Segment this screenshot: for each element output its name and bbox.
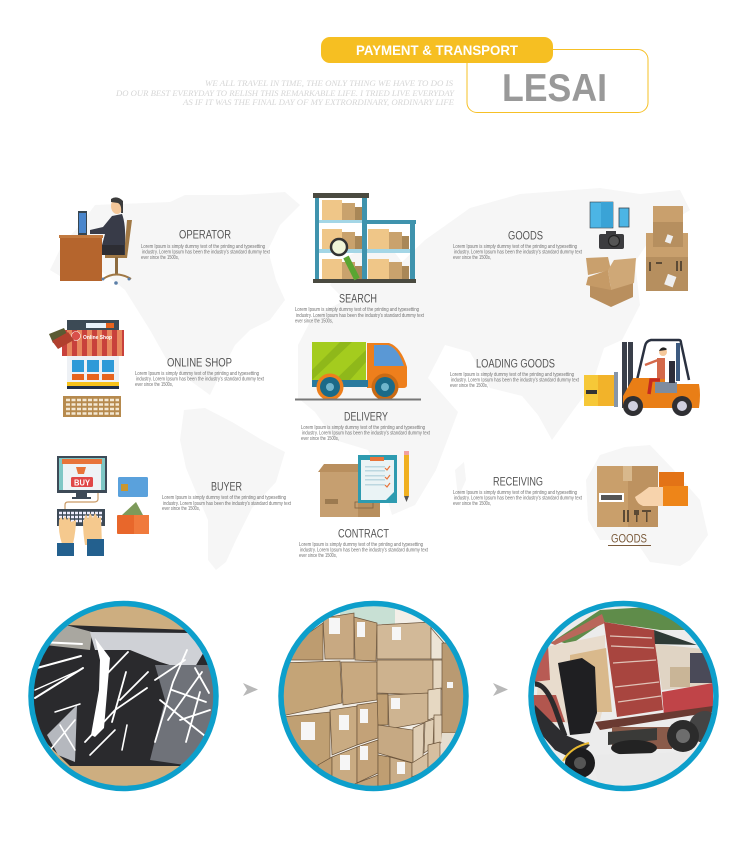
text: receiving: industry. Lorem Ipsum has been the industry's standard dummy text xyxy=(454,496,582,502)
text: operator: Lorem Ipsum is simply dummy text of the printing and typesetting xyxy=(141,244,265,250)
text: operator xyxy=(141,244,270,261)
text: search: industry. Lorem Ipsum has been the industry's standard dummy text xyxy=(296,313,424,319)
text: goods: Lorem Ipsum is simply dummy text of the printing and typesetting xyxy=(453,244,577,250)
text: loading goods: industry. Lorem Ipsum has been the industry's standard dummy text xyxy=(451,378,579,384)
icon: receiving box xyxy=(597,466,688,527)
heading: loading goods: LOADING GOODS xyxy=(476,358,555,370)
heading: operator: OPERATOR xyxy=(179,230,231,242)
arrow xyxy=(243,683,258,696)
heading: online shop: ONLINE SHOP xyxy=(167,358,232,370)
icon: online shop xyxy=(49,320,124,417)
icon: online shop: Online Shop xyxy=(83,335,113,341)
text: operator: industry. Lorem Ipsum has been the industry's standard dummy text xyxy=(142,250,270,256)
text: goods: industry. Lorem Ipsum has been the industry's standard dummy text xyxy=(454,250,582,256)
text: buyer: industry. Lorem Ipsum has been the industry's standard dummy text xyxy=(163,501,291,507)
icon: contract xyxy=(318,451,409,517)
icon: warehouse shelf xyxy=(313,193,416,283)
text: delivery: Lorem Ipsum is simply dummy text of the printing and typesetting xyxy=(301,425,425,431)
heading: contract: CONTRACT xyxy=(338,528,389,540)
heading: delivery: DELIVERY xyxy=(344,412,388,424)
outlined brand box xyxy=(467,50,648,112)
tagline: WE ALL TRAVEL IN TIME, THE ONLY THING WE HAVE TO DO IS xyxy=(205,78,454,88)
text: search xyxy=(295,307,424,324)
arrow xyxy=(493,683,508,696)
text: contract: industry. Lorem Ipsum has been the industry's standard dummy text xyxy=(300,548,428,554)
photo: wrapped black goods xyxy=(25,600,225,795)
tagline xyxy=(115,78,455,107)
text: goods: ever since the 1500s, xyxy=(453,255,491,261)
photo: forklift loading truck xyxy=(525,600,725,795)
tagline: AS IF IT WAS THE FINAL DAY OF MY EXTRORDINARY, ORDINARY LIFE xyxy=(182,97,455,107)
heading: goods: GOODS xyxy=(508,230,543,242)
text: loading goods: ever since the 1500s, xyxy=(450,383,488,389)
text: online shop: ever since the 1500s, xyxy=(135,382,173,388)
text: receiving: Lorem Ipsum is simply dummy text of the printing and typesetting xyxy=(453,490,577,496)
text: contract: ever since the 1500s, xyxy=(299,553,337,559)
text: contract xyxy=(299,542,428,559)
text: receiving: ever since the 1500s, xyxy=(453,501,491,507)
text: delivery: ever since the 1500s, xyxy=(301,436,339,442)
icon: buyer: BUY xyxy=(74,478,90,488)
text: receiving xyxy=(453,490,582,507)
text: online shop: industry. Lorem Ipsum has been the industry's standard dummy text xyxy=(136,377,264,383)
heading: receiving: RECEIVING xyxy=(493,476,543,488)
brand name: LESAI xyxy=(502,67,607,110)
text: delivery: industry. Lorem Ipsum has been the industry's standard dummy text xyxy=(302,431,430,437)
text: buyer: ever since the 1500s, xyxy=(162,506,200,512)
heading: search: SEARCH xyxy=(339,294,377,306)
text: search: Lorem Ipsum is simply dummy text of the printing and typesetting xyxy=(295,307,419,313)
icon: buyer xyxy=(57,456,149,556)
icon: goods electronics and boxes xyxy=(586,202,688,307)
text: contract: Lorem Ipsum is simply dummy text of the printing and typesetting xyxy=(299,542,423,548)
title: PAYMENT & TRANSPORT xyxy=(356,42,518,58)
text: delivery xyxy=(301,425,430,442)
icon: delivery truck xyxy=(295,342,421,400)
text: goods xyxy=(453,244,582,261)
text: loading goods xyxy=(450,372,579,389)
tagline: DO OUR BEST EVERYDAY TO RELISH THIS REMARKABLE LIFE. I TRIED LIVE EVERYDAY xyxy=(115,88,455,98)
text: online shop: Lorem Ipsum is simply dummy text of the printing and typesetting xyxy=(135,371,259,377)
yellow title pill xyxy=(321,37,553,63)
text: buyer xyxy=(162,495,291,512)
text: online shop xyxy=(135,371,264,388)
heading: buyer: BUYER xyxy=(211,482,242,494)
text: loading goods: Lorem Ipsum is simply dummy text of the printing and typesetting xyxy=(450,372,574,378)
photo: stacked cartons xyxy=(275,600,475,795)
header xyxy=(115,37,648,112)
caption: goods: GOODS xyxy=(611,534,647,546)
text: buyer: Lorem Ipsum is simply dummy text of the printing and typesetting xyxy=(162,495,286,501)
icon: forklift xyxy=(584,340,700,416)
world map background xyxy=(50,188,708,570)
icon: operator xyxy=(59,197,132,285)
text: search: ever since the 1500s, xyxy=(295,318,333,324)
text: operator: ever since the 1500s, xyxy=(141,255,179,261)
